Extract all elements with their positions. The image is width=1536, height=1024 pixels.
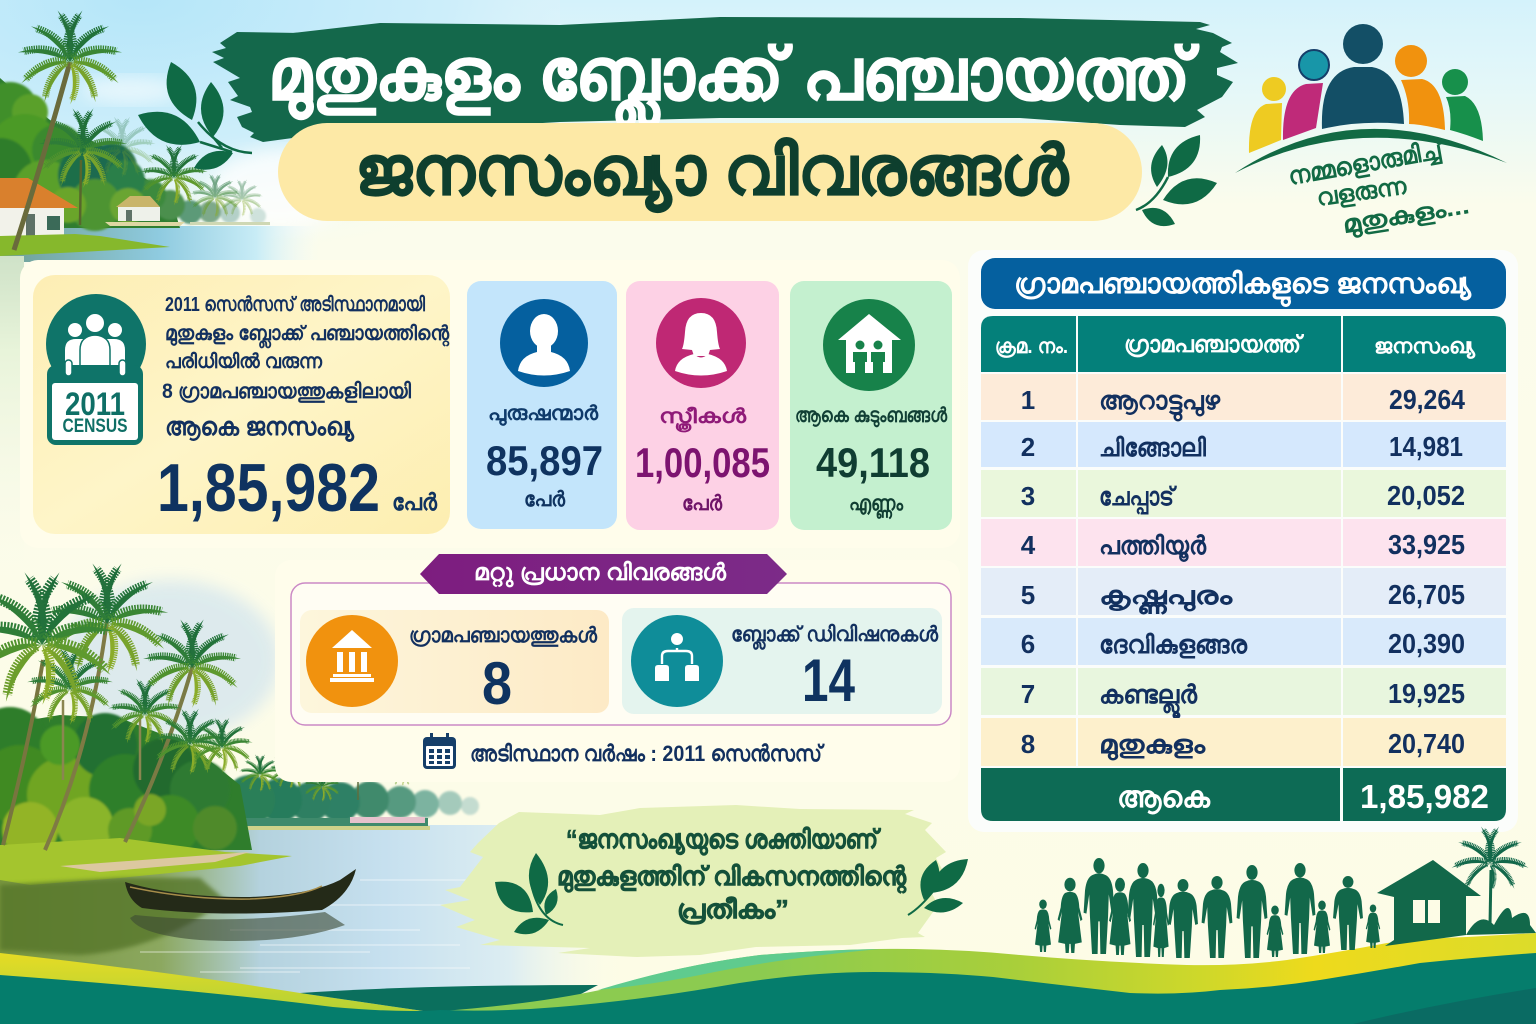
- illustration: house and palm silhouette: [1377, 825, 1536, 946]
- icon: green person: [1442, 69, 1483, 141]
- total row: 1,85,982: [1360, 778, 1489, 815]
- row 8: [981, 718, 1506, 766]
- row 1: 1: [1021, 385, 1035, 415]
- row 7: കണ്ടല്ലൂർ: [1099, 681, 1198, 720]
- table heading: [981, 258, 1506, 309]
- total row: [981, 768, 1506, 821]
- row 3: [981, 470, 1506, 517]
- text block: census description: 8 ഗ്രാമപഞ്ചായത്തുകളിലായി: [162, 379, 411, 404]
- title text: മുതുകുളം ബ്ലോക്ക് പഞ്ചായത്ത്: [268, 35, 1199, 130]
- card: block divisions: ബ്ലോക്ക് ഡിവിഷനുകൾ: [731, 622, 939, 650]
- scene: top-left backwater landscape: [0, 9, 350, 262]
- row 7: [981, 668, 1506, 720]
- row 7: 7: [1021, 679, 1035, 709]
- row 5: 26,705: [1388, 579, 1465, 610]
- logo: community group: [1235, 24, 1507, 240]
- icon: magenta person: [1283, 50, 1329, 140]
- icon: yellow person: [1249, 77, 1286, 153]
- panel: men: 85,897: [486, 437, 603, 484]
- icon: calendar: [423, 733, 456, 769]
- text block: census description: മുതുകുളം ബ്ലോക്ക് പഞ്ചായത്തിന്റെ: [165, 322, 450, 349]
- row 2: ചിങ്ങോലി: [1099, 434, 1207, 462]
- logo tagline: [1286, 136, 1472, 240]
- panel: other key details: [275, 554, 960, 782]
- panel: women: [626, 281, 779, 530]
- row 4: 33,925: [1388, 529, 1465, 560]
- row 6: ദേവികുളങ്ങര: [1099, 631, 1248, 659]
- icon: navy person: [1322, 24, 1404, 129]
- table header row: ജനസംഖ്യ: [1374, 335, 1476, 359]
- row 8: 20,740: [1388, 728, 1465, 759]
- heading ribbon: [420, 554, 787, 594]
- panel: women: സ്ത്രീകൾ: [659, 405, 747, 433]
- panel: men: പേർ: [524, 488, 566, 511]
- panel: households: എണ്ണം: [849, 492, 904, 520]
- illustration: family silhouettes: [1035, 858, 1380, 958]
- row 5: [981, 568, 1506, 615]
- panel: men: പുരുഷന്മാർ: [488, 403, 599, 426]
- subtitle text: ജനസംഖ്യാ വിവരങ്ങൾ: [355, 133, 1070, 213]
- base year text: അടിസ്ഥാന വർഷം : 2011 സെൻസസ്: [470, 741, 825, 766]
- total population unit: പേർ: [392, 489, 438, 515]
- row 5: 5: [1021, 580, 1035, 610]
- logo tagline: വളരുന്ന: [1315, 173, 1409, 212]
- row 3: 20,052: [1387, 480, 1465, 511]
- quote text: [557, 824, 907, 925]
- row 6: 6: [1021, 629, 1035, 659]
- waves: bottom ground bands: [0, 933, 1536, 1024]
- scene: sky top-left: [0, 0, 560, 260]
- table header row: ഗ്രാമപഞ്ചായത്ത്: [1124, 331, 1305, 358]
- panel: population summary background: [20, 260, 960, 548]
- panel: panchayat population table: [968, 250, 1518, 832]
- card: gram panchayats: ഗ്രാമപഞ്ചായത്തുകൾ: [409, 624, 598, 648]
- row 1: ആറാട്ടുപുഴ: [1099, 387, 1221, 422]
- icon: woman: [656, 298, 746, 388]
- icon: 2011 census calendar: 2011: [65, 386, 125, 422]
- total population number: 1,85,982: [157, 450, 380, 526]
- logo tagline: നമ്മളൊരുമിച്ച്: [1286, 136, 1448, 191]
- panel: households: [790, 281, 952, 530]
- row 2: 14,981: [1389, 431, 1463, 462]
- card: gram panchayats: [300, 610, 609, 717]
- row 4: 4: [1021, 530, 1036, 560]
- row 1: 29,264: [1389, 384, 1465, 415]
- card: block divisions: [622, 608, 942, 714]
- icon: quote leaf right: [908, 859, 968, 915]
- icon: government building: [306, 615, 398, 707]
- panel: women: പേർ: [682, 492, 723, 515]
- row 7: 19,925: [1388, 678, 1465, 709]
- scene: bottom-left palms and backwater: [0, 562, 620, 1000]
- row 4: [981, 519, 1506, 566]
- quote text: പ്രതീകം”: [677, 894, 789, 925]
- row 6: [981, 618, 1506, 665]
- row 1: [981, 374, 1506, 422]
- icon: man: [500, 299, 588, 387]
- icon: leaf branch left: [138, 62, 252, 170]
- text block: census description: ആകെ ജനസംഖ്യ: [165, 413, 355, 442]
- text block: census description: [162, 293, 450, 442]
- icon: wooden boat: [125, 869, 356, 941]
- card: gram panchayats: 8: [482, 650, 512, 717]
- card: block divisions: 14: [802, 647, 855, 714]
- row 2: 2: [1021, 432, 1035, 462]
- subtitle pill: [278, 123, 1142, 221]
- quote text: മുതുകുളത്തിന് വികസനത്തിന്റെ: [557, 861, 907, 894]
- panel: quote: [440, 805, 968, 957]
- panel: men: [467, 281, 617, 529]
- row 5: കൃഷ്ണപുരം: [1099, 582, 1233, 615]
- panel: households: 49,118: [816, 439, 930, 486]
- table heading: ഗ്രാമപഞ്ചായത്തികളുടെ ജനസംഖ്യ: [1014, 268, 1472, 307]
- panel: women: 1,00,085: [635, 439, 770, 486]
- row 4: പത്തിയൂർ: [1099, 532, 1206, 563]
- icon: orange person: [1395, 45, 1445, 130]
- row 8: 8: [1021, 729, 1035, 759]
- icon: 2011 census calendar: [46, 294, 146, 445]
- total row: ആകെ: [1117, 781, 1211, 815]
- row 3: 3: [1021, 481, 1035, 511]
- row 2: [981, 422, 1506, 467]
- panel: households: ആകെ കുടുംബങ്ങൾ: [795, 405, 948, 428]
- table header row: ക്രമ. നം.: [995, 336, 1068, 358]
- quote text: “ജനസംഖ്യയുടെ ശക്തിയാണ്: [566, 824, 881, 856]
- icon: quote leaf left: [495, 853, 563, 934]
- icon: leaf branch right: [1136, 135, 1217, 226]
- row 3: ചേപ്പാട്: [1099, 483, 1177, 515]
- heading ribbon: മറ്റു പ്രധാന വിവരങ്ങൾ: [474, 559, 727, 588]
- text block: census description: പരിധിയിൽ വരുന്ന: [165, 350, 323, 373]
- icon: organisation: [631, 615, 723, 707]
- icon: house with family: [823, 299, 915, 391]
- panel: total population: [33, 275, 450, 534]
- scene: left edge strip: [0, 256, 24, 576]
- row 6: 20,390: [1388, 628, 1465, 659]
- row 8: മുതുകുളം: [1099, 731, 1206, 761]
- text block: census description: 2011 സെൻസസ് അടിസ്ഥാനമായി: [165, 293, 426, 316]
- logo tagline: മുതുകുളം...: [1341, 192, 1472, 240]
- table header row: [981, 316, 1506, 372]
- icon: 2011 census calendar: CENSUS: [62, 416, 128, 437]
- title banner: brush stroke: [212, 17, 1238, 142]
